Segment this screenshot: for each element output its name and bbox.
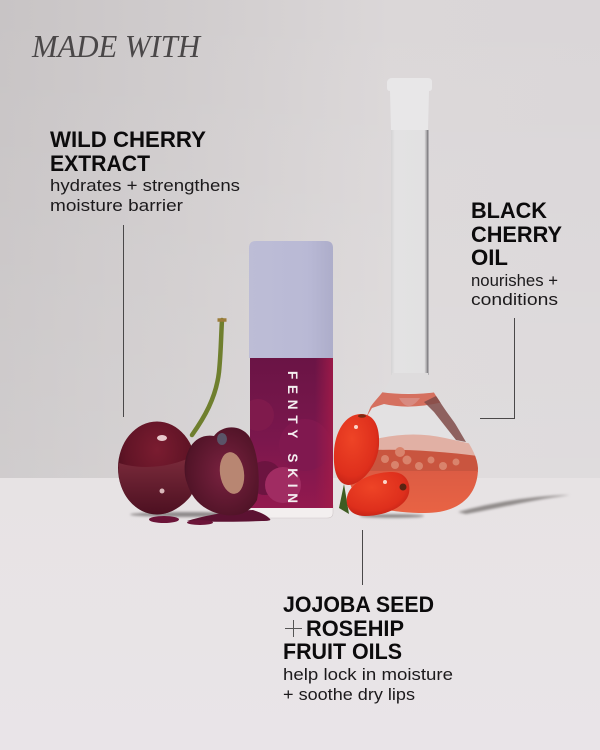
cherry stem [192, 320, 222, 435]
callout: black cherry oil [471, 198, 562, 309]
callout: jojoba seed and rosehip fruit oils [283, 592, 453, 704]
flask [350, 78, 478, 513]
rosehip: lying [347, 472, 409, 516]
flask collar [387, 78, 432, 130]
leader line: jojoba [362, 530, 364, 585]
callout: jojoba seed and rosehip fruit oils: + soothe dry lips [283, 686, 415, 704]
cherry body [118, 422, 196, 514]
bottle base [250, 505, 333, 518]
callout: wild cherry extract: hydrates + strengthens [50, 177, 240, 195]
rosehip: upright [334, 414, 379, 514]
callout: wild cherry extract [50, 127, 240, 215]
flask neck [391, 130, 429, 375]
callout: wild cherry extract: EXTRACT [50, 151, 150, 176]
floor surface [0, 478, 600, 750]
bottle liquid [242, 358, 333, 508]
shadows on floor [130, 495, 570, 518]
callout: jojoba seed and rosehip fruit oils: JOJOBA SEED [283, 592, 434, 617]
callout: black cherry oil: BLACK [471, 198, 548, 223]
callout: jojoba seed and rosehip fruit oils: FRUIT OILS [283, 639, 402, 664]
callout: wild cherry extract: moisture barrier [50, 197, 184, 215]
flask bulb [350, 373, 478, 513]
callout: jojoba seed and rosehip fruit oils: help lock in moisture [283, 666, 453, 684]
whole cherry [118, 320, 226, 514]
title: MADE WITH [31, 28, 202, 64]
product bottle [242, 241, 333, 518]
bottle cap [249, 241, 333, 358]
cherry pit [217, 451, 247, 495]
juice puddle [187, 510, 270, 522]
leader line: black cherry oil [480, 318, 514, 418]
halved cherry [149, 427, 270, 525]
callout: jojoba seed and rosehip fruit oils: ROSEHIP [306, 616, 404, 641]
bottle brand text: FENTY SKIN [285, 371, 300, 503]
callout: black cherry oil: conditions [471, 291, 558, 309]
callout: black cherry oil: OIL [471, 245, 508, 270]
cherry half [185, 427, 259, 515]
wall background [0, 0, 600, 478]
callout: black cherry oil: CHERRY [471, 222, 562, 247]
callout: wild cherry extract: WILD CHERRY [50, 127, 206, 152]
leader line: wild cherry [122, 225, 124, 417]
callout: black cherry oil: nourishes + [471, 272, 558, 290]
